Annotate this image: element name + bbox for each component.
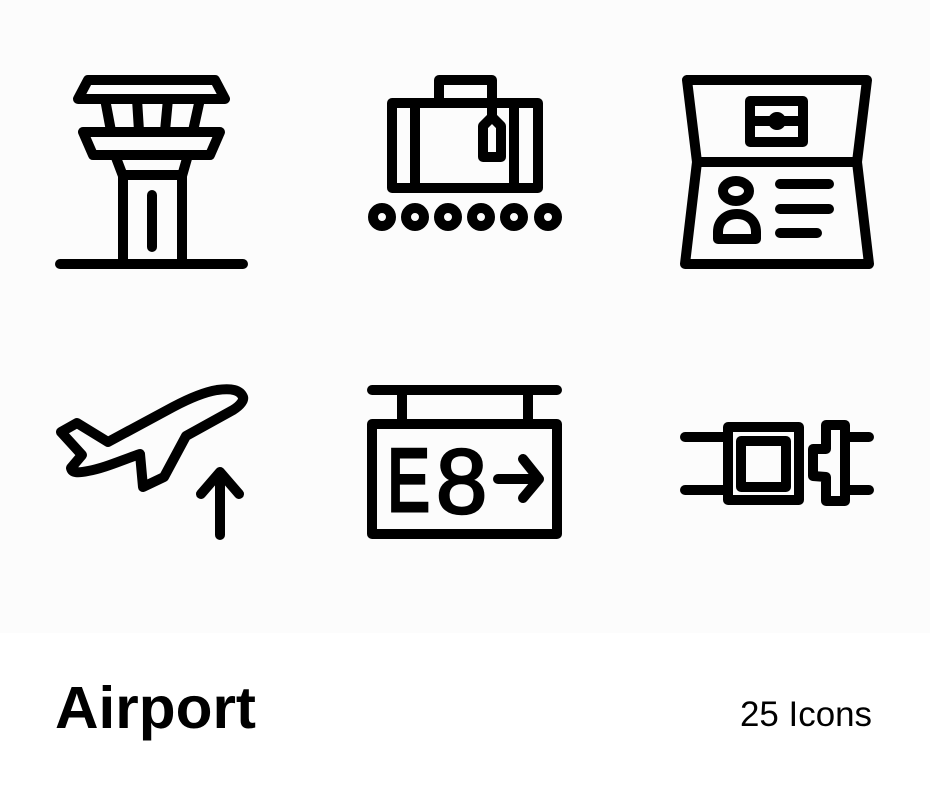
title: Airport xyxy=(55,675,256,741)
icon: passport xyxy=(685,80,869,264)
icon: control tower xyxy=(60,80,243,264)
icon: seat belt xyxy=(685,425,869,501)
icon: gate sign E8 xyxy=(372,390,557,534)
icon: airplane taking off xyxy=(61,389,243,535)
sign number: 8 xyxy=(436,431,487,533)
icon: baggage conveyor xyxy=(373,80,557,226)
sign label: E xyxy=(387,432,430,530)
icon count: 25 Icons xyxy=(740,695,872,734)
